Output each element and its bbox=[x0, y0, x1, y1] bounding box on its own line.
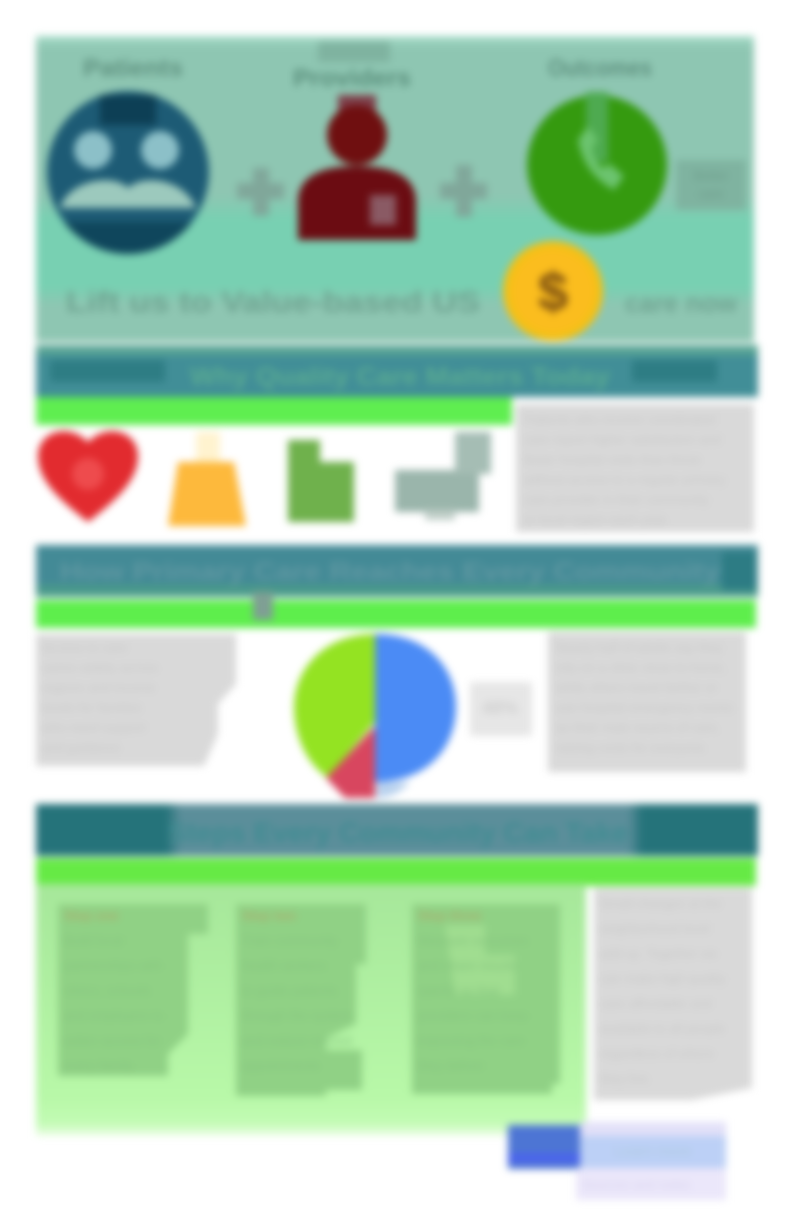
text block: section three side: care affordable and bbox=[600, 996, 712, 1011]
text block: section one description: or local region each year. bbox=[524, 512, 669, 527]
column: step two: appointments bbox=[242, 1058, 321, 1073]
column: step two: Train community bbox=[242, 933, 338, 948]
column: step one bbox=[58, 904, 208, 1076]
text block: section three side: add up. Together we bbox=[600, 946, 718, 961]
text block: section three side: available to all people bbox=[600, 1021, 725, 1036]
callout: outcome label: Better bbox=[694, 168, 729, 183]
band: section one green bar bbox=[36, 397, 512, 425]
text: source note bbox=[576, 1168, 726, 1200]
band: section three heading bbox=[36, 804, 758, 856]
icon: dollar coin: $ bbox=[538, 262, 568, 322]
column: step one: widen access for bbox=[63, 1033, 161, 1048]
icon: pointer bbox=[253, 592, 273, 620]
column: step one: every family bbox=[64, 1058, 134, 1073]
column: step three bbox=[412, 904, 560, 1094]
column: step one: and employers to bbox=[64, 1008, 164, 1023]
text block: section two left: Access to care bbox=[42, 640, 127, 655]
column: step one: Step one bbox=[64, 908, 119, 923]
text block: section two right: raising costs for everyone. bbox=[556, 740, 708, 755]
text block: section three side bbox=[594, 888, 752, 1100]
text block: section three side: Small changes at the bbox=[600, 896, 721, 911]
text block: section two left: who need support bbox=[41, 720, 146, 735]
text block: section two left: regions and income bbox=[42, 680, 155, 695]
column: step two: through the system bbox=[242, 1008, 353, 1023]
chart label bbox=[470, 682, 532, 736]
column: step two bbox=[236, 904, 366, 1096]
text block: section two right: rely on a clinic close to home, bbox=[556, 660, 727, 675]
text block: section two left: varies widely across bbox=[42, 660, 159, 675]
band: section two heading: How Primary Care Reaches Every Community bbox=[60, 558, 720, 586]
band: section two green bar bbox=[36, 600, 756, 628]
callout: outcome label: care bbox=[698, 186, 724, 201]
text block: section two right: use hospital emergency rooms bbox=[556, 700, 734, 715]
icon: flask bbox=[168, 432, 246, 526]
text block: section two right bbox=[548, 632, 746, 772]
callout: learn more button bbox=[508, 1122, 726, 1169]
text: value statement end: care now bbox=[625, 288, 738, 318]
column: step one: Build local bbox=[64, 933, 123, 948]
column: step one: partnerships with bbox=[64, 958, 162, 973]
text block: section one description: fewer hospital visits than those bbox=[524, 452, 701, 467]
column: step three: they deliver bbox=[418, 1058, 485, 1073]
text block: section two left: and guidance bbox=[42, 740, 120, 755]
column: step two: to guide patients bbox=[242, 983, 338, 998]
text block: section one description: without access to a regular primary bbox=[523, 472, 726, 487]
icon: bar columns bbox=[288, 440, 354, 522]
icon: plus sign right bbox=[440, 165, 487, 217]
icon: cart bbox=[395, 432, 491, 520]
panel: community steps bbox=[36, 884, 586, 1136]
column: step one: clinics, schools bbox=[64, 983, 151, 998]
text block: section one description bbox=[516, 404, 754, 532]
icon: green phone circle bbox=[527, 92, 667, 235]
icon: heart bbox=[38, 431, 138, 522]
chart label: 48% bbox=[482, 698, 518, 718]
icon: patients circle bbox=[47, 91, 209, 254]
callout: learn more button: Learn more bbox=[615, 1143, 691, 1160]
column: step three: Measure outcomes bbox=[418, 933, 529, 948]
text block: section two left: levels for families bbox=[42, 700, 142, 715]
text block: section three side: regardless of where bbox=[600, 1046, 714, 1061]
icon: dollar coin bbox=[503, 241, 603, 341]
band: section three green bar bbox=[36, 858, 756, 886]
column: step two: and reduce missed bbox=[242, 1033, 352, 1048]
text block: section three side: they live. bbox=[600, 1071, 651, 1086]
text: value statement: Lift us to Value-based US bbox=[66, 286, 480, 319]
icon: plus sign left bbox=[237, 168, 284, 216]
heading: patients: Patients bbox=[83, 55, 183, 82]
heading: providers: Providers bbox=[293, 65, 411, 92]
text block: section three side: can make high quality bbox=[600, 971, 726, 986]
text block: section three side: neighborhood level bbox=[600, 921, 710, 936]
band: section three heading: Steps Every Community Can Take bbox=[168, 817, 628, 848]
band: section one heading bbox=[36, 345, 758, 397]
text block: section two right: as their main source of care, bbox=[556, 720, 720, 735]
band: section two heading bbox=[36, 545, 758, 597]
text: source note: Sources and notes bbox=[582, 1177, 691, 1192]
callout: outcome label bbox=[676, 160, 746, 210]
pie chart bbox=[294, 634, 456, 798]
text block: section two right: while others travel farther or bbox=[555, 680, 718, 695]
column: step three: Step three bbox=[418, 908, 482, 923]
text block: section one description: care report higher satisfaction and bbox=[524, 432, 721, 447]
column: step three: providers can keep bbox=[418, 1008, 528, 1023]
heading: providers bbox=[293, 42, 411, 92]
panel: care journey header bbox=[36, 36, 754, 342]
panel: icons row bbox=[38, 431, 491, 526]
text block: section one description: care provider in their community bbox=[524, 492, 709, 507]
heading: outcomes: Outcomes bbox=[548, 55, 652, 82]
column: step three: and share results bbox=[418, 958, 518, 973]
column: step two: health workers bbox=[242, 958, 327, 973]
text block: section two right: Nearly half of adults say they bbox=[556, 640, 723, 655]
column: step two: Step two bbox=[242, 908, 296, 923]
text block: section two left bbox=[36, 634, 236, 766]
icon: provider person bbox=[298, 95, 416, 240]
band: section one heading: Why Quality Care Matters Today bbox=[190, 363, 610, 391]
column: step three: openly so that bbox=[418, 983, 499, 998]
column: step three: improving the care bbox=[418, 1033, 525, 1048]
text block: section one description: Patients who receive coordinated bbox=[524, 412, 716, 427]
